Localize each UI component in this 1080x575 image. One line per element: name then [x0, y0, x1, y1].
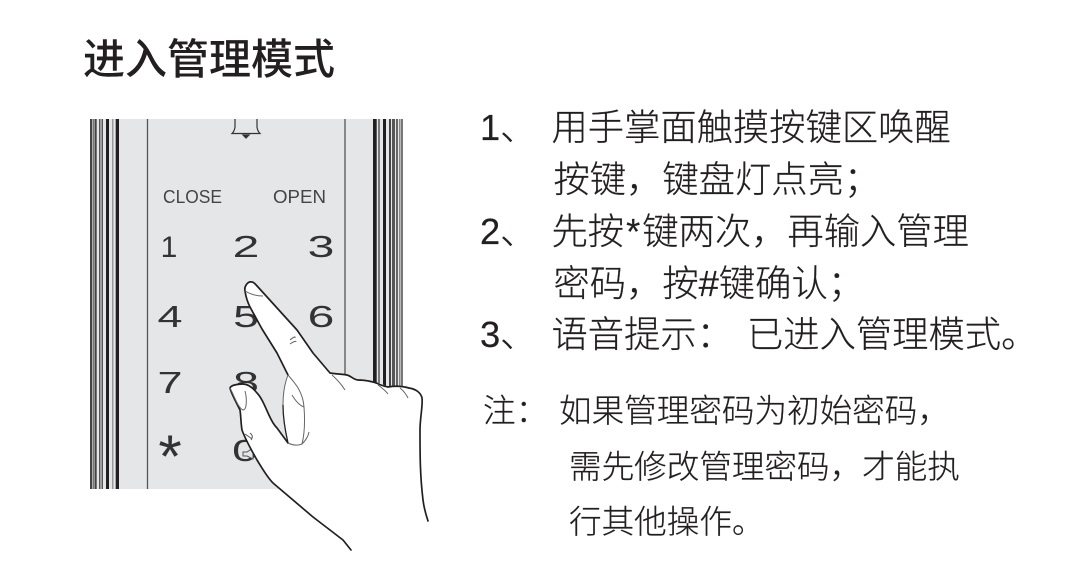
step 1 text: 用手掌面触摸按键区唤醒	[552, 107, 951, 148]
labels: close and open	[163, 186, 326, 207]
note line 1: 如果管理密码为初始密码，	[559, 392, 950, 429]
icon: hand pressing key 5	[230, 282, 428, 550]
keypad frame lines	[148, 119, 345, 489]
title: 进入管理模式	[83, 36, 335, 83]
note line 3: 行其他操作。	[569, 503, 764, 540]
step 2 text: 先按*键两次，再输入管理	[552, 211, 969, 252]
step 3 message: 已进入管理模式。	[747, 314, 1037, 355]
keypad digits: 3	[308, 229, 334, 264]
icon: speaker on zero key	[243, 448, 253, 459]
keypad digits: 7	[157, 366, 183, 400]
keypad digits: *	[158, 423, 182, 490]
step 2 continued: 密码，按#键确认；	[554, 263, 864, 304]
right edge stripes	[373, 119, 403, 489]
keypad digits: 1	[161, 231, 177, 264]
keypad digits: 8	[233, 366, 259, 400]
labels: close and open: CLOSE	[163, 186, 222, 207]
step 1: 1、	[480, 107, 536, 148]
labels: close and open: OPEN	[273, 186, 326, 207]
panel: lock body	[90, 119, 403, 489]
note line 2: 需先修改管理密码，才能执	[569, 448, 960, 485]
step 1 continued: 按键，键盘灯点亮；	[554, 159, 880, 200]
step 3 text: 语音提示：	[552, 314, 733, 355]
step 2: 2、	[480, 211, 536, 252]
keypad digits: 2	[233, 229, 259, 264]
keypad digits: 4	[157, 300, 183, 334]
keypad digits: 0	[232, 434, 258, 468]
note label: 注：	[483, 392, 548, 429]
keypad digits: 6	[308, 299, 334, 334]
icon: bell	[232, 119, 260, 138]
step 3: 3、	[480, 314, 536, 355]
left edge stripes	[90, 119, 119, 489]
keypad digits: 5	[233, 300, 259, 334]
steps text	[480, 107, 1037, 355]
note text	[483, 392, 960, 540]
keypad digits	[157, 229, 334, 490]
